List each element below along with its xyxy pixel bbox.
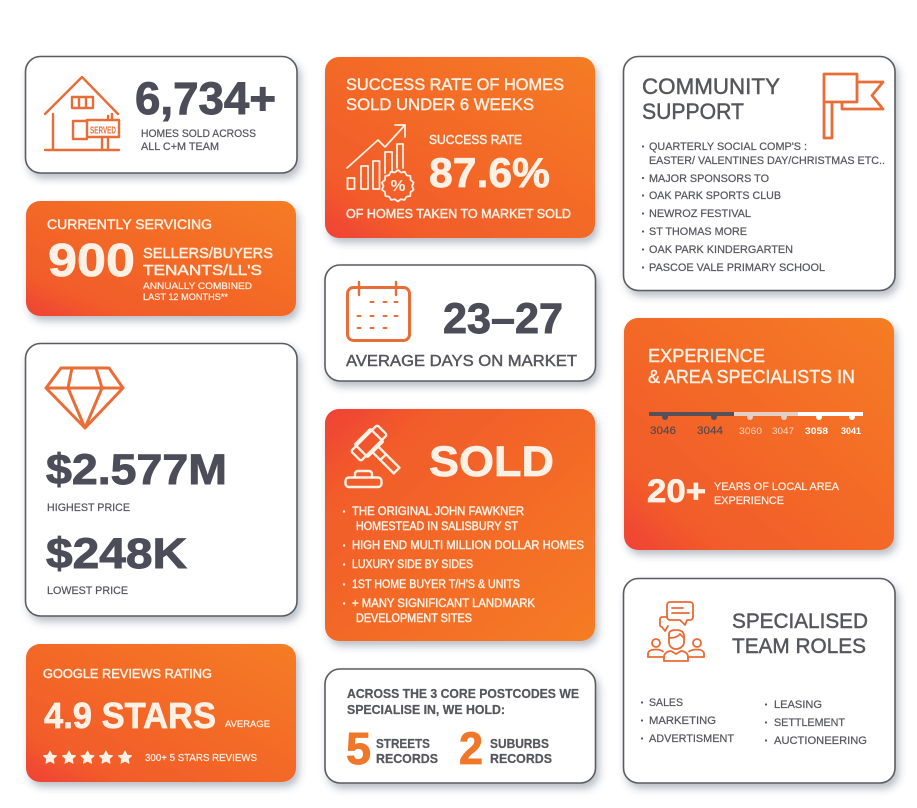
text: reviews count: 300+ 5 STARS REVIEWS xyxy=(145,753,257,764)
panel: community support xyxy=(624,56,895,290)
panel: homes sold xyxy=(26,56,297,173)
panel: experience and area specialists xyxy=(624,318,894,550)
heading: success rate of homes: SOLD UNDER 6 WEEKS xyxy=(346,96,534,114)
icon: gavel xyxy=(346,424,410,487)
heading: experience and area specialists: EXPERIENCE xyxy=(648,346,765,366)
list: roles right: LEASING xyxy=(774,699,822,711)
text: suburbs records xyxy=(490,737,552,766)
text: sellers and buyers: ANNUALLY COMBINED xyxy=(143,281,252,292)
text: highest price label: HIGHEST PRICE xyxy=(47,502,130,514)
text: sellers and buyers: LAST 12 MONTHS** xyxy=(143,292,228,303)
list: sold properties: HIGH END MULTI MILLION DOLLAR HOMES xyxy=(352,540,584,552)
list: roles right xyxy=(765,699,867,747)
text: success rate label: SUCCESS RATE xyxy=(429,133,522,147)
stat: 20+: 20+ xyxy=(647,473,706,509)
list: roles left: SALES xyxy=(649,697,683,709)
panel: success rate xyxy=(325,57,595,238)
text: suburbs records: SUBURBS xyxy=(490,737,549,751)
text: years of local area experience xyxy=(714,481,840,507)
text: streets records xyxy=(376,737,438,766)
stat: 87.6%: 87.6% xyxy=(429,149,550,196)
text: years of local area experience: EXPERIENCE xyxy=(714,495,784,507)
list: community items: ST THOMAS MORE xyxy=(649,226,747,238)
heading: specialised team roles: SPECIALISED xyxy=(732,610,868,633)
text: across the 3 core postcodes xyxy=(347,687,579,717)
chart: postcode timeline: 3046 xyxy=(650,425,676,437)
list: roles left: MARKETING xyxy=(649,715,716,727)
chart: postcode timeline xyxy=(649,412,863,437)
heading: success rate of homes xyxy=(346,76,564,114)
icon: flag xyxy=(824,74,883,138)
stat: 5: 5 xyxy=(346,723,371,774)
list: sold properties: 1ST HOME BUYER T/H'S & UNITS xyxy=(352,579,520,591)
icon: house with served sign: SERVED xyxy=(90,126,116,136)
heading: community support: COMMUNITY xyxy=(642,74,780,99)
list: sold properties xyxy=(343,506,584,625)
list: roles right: SETTLEMENT xyxy=(774,717,845,729)
chart: postcode timeline: 3041 xyxy=(841,426,862,437)
list: community items: NEWROZ FESTIVAL xyxy=(649,208,751,220)
stat: highest price: $2.577M xyxy=(46,446,227,494)
text: streets records: RECORDS xyxy=(376,752,438,766)
panel: specialised team roles xyxy=(624,578,895,783)
list: community items: MAJOR SPONSORS TO xyxy=(649,173,769,185)
panel: currently servicing xyxy=(26,201,296,316)
heading: experience and area specialists: & AREA SPECIALISTS IN xyxy=(648,367,855,387)
text: suburbs records: RECORDS xyxy=(490,752,552,766)
heading: specialised team roles: TEAM ROLES xyxy=(732,635,866,658)
list: community items: OAK PARK SPORTS CLUB xyxy=(649,190,781,202)
panel: price range xyxy=(26,344,297,616)
icon: growth chart with percent badge xyxy=(347,125,414,202)
list: community items xyxy=(642,141,885,274)
text: sellers and buyers xyxy=(143,246,273,303)
panel: google reviews xyxy=(26,644,296,782)
stat: 2: 2 xyxy=(459,723,483,774)
stat: 4.9 stars: 4.9 STARS xyxy=(44,695,216,736)
heading: experience and area specialists xyxy=(648,346,855,387)
stat: lowest price: $248K xyxy=(46,530,187,578)
icon: team with speech bubbles xyxy=(648,602,704,661)
text: homes sold caption: HOMES SOLD ACROSS xyxy=(141,128,256,140)
text: sellers and buyers: SELLERS/BUYERS xyxy=(143,246,273,262)
list: sold properties: + MANY SIGNIFICANT LANDMARK xyxy=(352,598,535,610)
heading: success rate of homes: SUCCESS RATE OF HOMES xyxy=(346,76,564,94)
stat: 23-27: 23–27 xyxy=(443,295,563,343)
list: community items: EASTER/ VALENTINES DAY/CHRISTMAS ETC.. xyxy=(649,155,885,167)
text: streets records: STREETS xyxy=(376,737,430,751)
text: lowest price label: LOWEST PRICE xyxy=(47,585,128,597)
text: years of local area experience: YEARS OF LOCAL AREA xyxy=(714,481,840,493)
list: sold properties: DEVELOPMENT SITES xyxy=(356,613,472,625)
icon: calendar xyxy=(348,282,410,340)
text: average: AVERAGE xyxy=(225,719,270,730)
panel: average days on market xyxy=(325,265,596,381)
chart: postcode timeline: 3047 xyxy=(772,426,794,437)
text: across the 3 core postcodes: SPECIALISE IN, WE HOLD: xyxy=(347,703,505,717)
text: across the 3 core postcodes: ACROSS THE 3 CORE POSTCODES WE xyxy=(347,687,579,701)
list: roles left: ADVERTISMENT xyxy=(649,733,734,745)
list: roles left xyxy=(641,697,734,745)
icon: diamond xyxy=(46,368,123,428)
heading: specialised team roles xyxy=(732,610,868,658)
heading: currently servicing: CURRENTLY SERVICING xyxy=(47,216,212,232)
icon: growth chart with percent badge: % xyxy=(390,178,406,195)
list: sold properties: THE ORIGINAL JOHN FAWKNER xyxy=(352,506,524,518)
text: average days on market: AVERAGE DAYS ON MARKET xyxy=(346,353,577,370)
stat: 6,734+: 6,734+ xyxy=(135,73,276,124)
list: roles right: AUCTIONEERING xyxy=(774,735,867,747)
panel: sold xyxy=(325,409,595,641)
text: homes sold caption: ALL C+M TEAM xyxy=(141,141,219,153)
list: community items: QUARTERLY SOCIAL COMP'S : xyxy=(649,141,807,153)
heading: community support: SUPPORT xyxy=(642,99,744,124)
chart: postcode timeline: 3060 xyxy=(739,426,762,437)
icon: house with served sign xyxy=(45,77,119,150)
text: homes sold caption xyxy=(141,128,256,153)
text: of homes taken to market sold: OF HOMES TAKEN TO MARKET SOLD xyxy=(346,207,571,221)
heading: google reviews rating: GOOGLE REVIEWS RATING xyxy=(43,666,212,681)
list: community items: PASCOE VALE PRIMARY SCHOOL xyxy=(649,262,825,274)
heading: community support xyxy=(642,74,780,124)
list: sold properties: LUXURY SIDE BY SIDES xyxy=(352,559,473,571)
list: sold properties: HOMESTEAD IN SALISBURY ST xyxy=(356,521,518,533)
list: community items: OAK PARK KINDERGARTEN xyxy=(649,244,793,256)
stat: 900: 900 xyxy=(48,234,135,286)
icon: five stars xyxy=(44,751,132,763)
text: sellers and buyers: TENANTS/LL'S xyxy=(143,263,262,279)
chart: postcode timeline: 3044 xyxy=(697,425,723,437)
heading: sold: SOLD xyxy=(429,438,554,486)
chart: postcode timeline: 3058 xyxy=(805,426,828,437)
panel: core postcodes records xyxy=(325,669,596,783)
